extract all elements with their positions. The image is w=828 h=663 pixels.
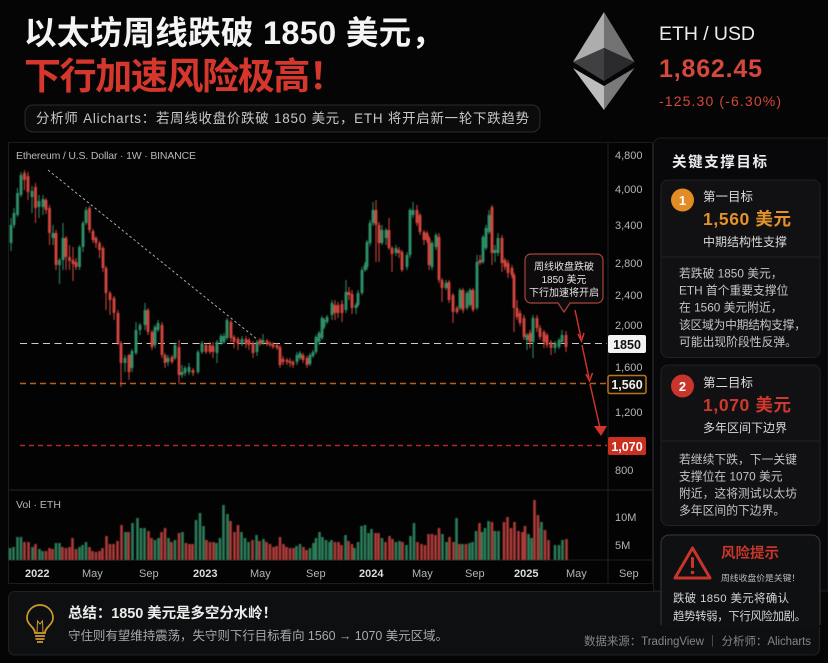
header title: 以太坊周线跌破 1850 美元， (24, 15, 444, 51)
price axis labels: 4,000 (615, 184, 643, 196)
price axis labels: 800 (615, 465, 633, 477)
callout: weekly close warning: 下行加速将开启 (529, 286, 599, 299)
card: risk warning (661, 535, 820, 627)
target description: 中期结构性支撑 (703, 234, 787, 249)
time axis labels: May (566, 568, 587, 580)
callout: weekly close warning: 1850 美元 (541, 273, 587, 286)
target label: 第二目标 (703, 376, 753, 390)
panel: price chart (8, 142, 652, 584)
subtitle pill: 分析师 Alicharts：若周线收盘价跌破 1850 美元，ETH 将开启新一轮下跌趋势 (36, 110, 529, 126)
card: first target (661, 180, 820, 358)
target price: 1,070 美元 (703, 395, 791, 415)
time axis labels: May (250, 568, 271, 580)
target text: 附近，这将测试以太坊 (679, 486, 797, 500)
time axis labels: 2022 (25, 568, 49, 580)
arrow: path to 1070 (590, 384, 607, 436)
target description: 多年区间下边界 (703, 421, 787, 435)
panel: summary footer (8, 592, 820, 655)
price tag 1560: 1,560 (611, 378, 643, 392)
price axis labels: 2,400 (615, 290, 643, 302)
level line 1560 (20, 382, 607, 384)
price tag 1560 (608, 376, 646, 394)
volume axis labels: 5M (615, 540, 630, 552)
volume axis labels (615, 512, 636, 552)
level line 1850 (20, 342, 607, 344)
icon: badge 2 (671, 374, 694, 398)
trend line (48, 170, 258, 340)
time axis labels: Sep (619, 568, 639, 580)
risk text: 跌破 1850 美元将确认 (673, 591, 790, 605)
target text: ETH 首个重要支撑位 (679, 284, 789, 298)
header title: 下行加速风险极高！ (24, 56, 346, 97)
card: second target (661, 365, 820, 526)
callout: weekly close warning (525, 254, 603, 312)
price block (659, 23, 781, 109)
risk subheading: 周线收盘价是关键！ (721, 572, 800, 583)
subtitle pill (25, 105, 540, 132)
volume label: Vol · ETH (16, 499, 61, 511)
icon: light bulb (27, 605, 53, 642)
target text (679, 266, 806, 349)
target label: 第一目标 (703, 190, 753, 204)
data source: 数据来源：TradingView ｜ 分析师：Alicharts (584, 634, 811, 648)
price tag 1850: 1850 (613, 338, 641, 352)
target text: 支撑位在 1070 美元 (679, 470, 783, 484)
icon: badge 1: 1 (679, 193, 686, 208)
price axis labels: 2,800 (615, 258, 643, 270)
price block: 1,862.45 (659, 55, 762, 83)
price axis labels: 3,400 (615, 220, 643, 232)
chart source label: Ethereum / U.S. Dollar · 1W · BINANCE (16, 150, 196, 162)
time axis labels: Sep (465, 568, 485, 580)
time axis labels: 2023 (193, 568, 217, 580)
target text: 若跌破 1850 美元， (679, 266, 783, 280)
candlesticks (11, 170, 566, 387)
arrow: path to 1560 (582, 345, 592, 381)
volume bars (10, 500, 566, 560)
icon: badge 2: 2 (679, 379, 686, 394)
target text: 多年区间的下边界。 (679, 504, 785, 518)
price block: -125.30 (-6.30%) (659, 93, 781, 109)
time axis labels: Sep (139, 568, 159, 580)
price axis labels: 1,600 (615, 362, 643, 374)
target text: 在 1560 美元附近， (679, 300, 783, 314)
time axis labels: May (412, 568, 433, 580)
summary text: 守住则有望维持震荡，失守则下行目标看向 1560 → 1070 美元区域。 (68, 628, 448, 643)
level line 1070 (20, 444, 607, 446)
icon: warning triangle (675, 548, 710, 578)
target text: 若继续下跌，下一关键 (679, 452, 797, 466)
time axis labels (25, 568, 639, 580)
time axis labels: 2024 (359, 568, 384, 580)
time axis labels: 2025 (514, 568, 538, 580)
summary heading: 总结：1850 美元是多空分水岭！ (68, 604, 277, 622)
price tag 1070: 1,070 (611, 440, 643, 454)
target text: 该区域为中期结构支撑， (679, 318, 806, 332)
time axis labels: Sep (306, 568, 326, 580)
price tag 1850 (608, 335, 646, 353)
time axis labels: May (82, 568, 103, 580)
icon: badge 1 (671, 188, 694, 212)
volume axis labels: 10M (615, 512, 636, 524)
risk heading: 风险提示 (721, 544, 779, 562)
risk text line 2: 趋势转弱，下行风险加剧。 (673, 609, 806, 623)
price axis labels (615, 150, 643, 477)
price axis labels: 1,200 (615, 407, 643, 419)
price block: ETH / USD (659, 23, 755, 45)
panel: key support targets (654, 138, 828, 627)
header title (24, 15, 444, 97)
price axis labels: 2,000 (615, 320, 643, 332)
target price: 1,560 美元 (703, 209, 791, 229)
target text (679, 452, 797, 518)
callout: weekly close warning: 周线收盘跌破 (534, 260, 594, 273)
side panel heading: 关键支撑目标 (672, 153, 768, 171)
icon: ethereum logo (573, 12, 634, 110)
price tag 1070 (608, 437, 646, 455)
price axis labels: 4,800 (615, 150, 643, 162)
arrow: path to 1850 (575, 310, 584, 341)
target text: 可能出现阶段性反弹。 (679, 335, 797, 349)
